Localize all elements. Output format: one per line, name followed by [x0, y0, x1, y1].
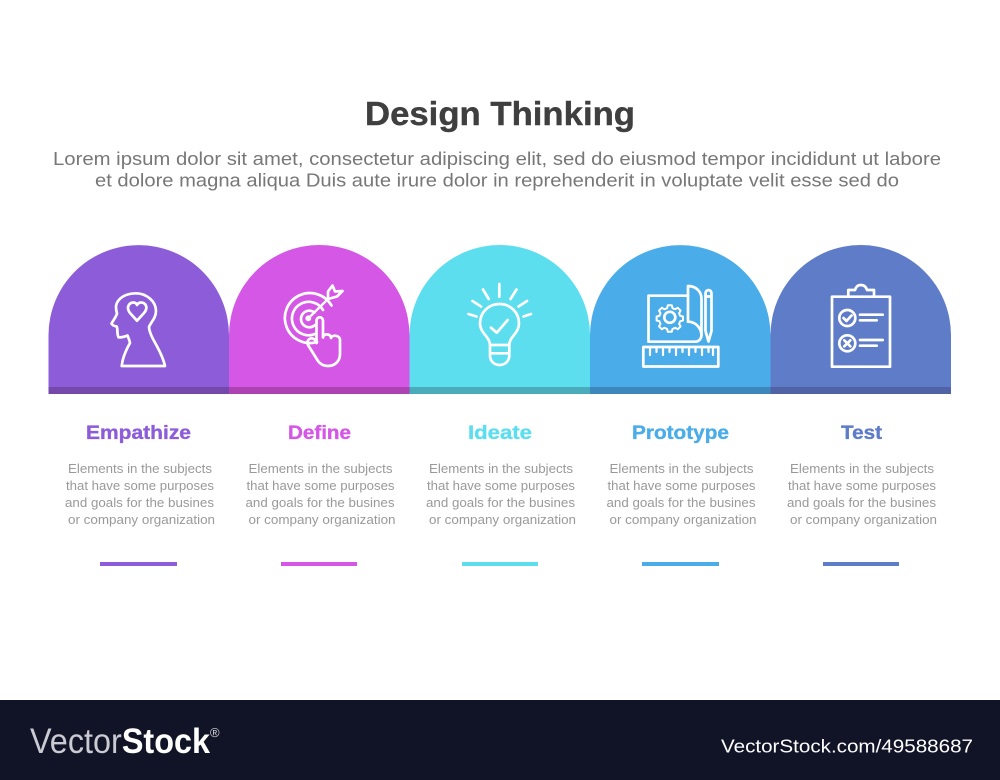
accent bar: define	[281, 562, 357, 566]
icon: clipboard checklist	[832, 285, 890, 367]
text block: prototype description	[606, 461, 756, 527]
accent bar: empathize	[100, 562, 177, 566]
subtitle text: Lorem ipsum dolor sit amet, consectetur adipiscing elit, sed do eiusmod tempor incididunt ut labore	[53, 148, 941, 169]
icon: target with hand	[285, 286, 342, 366]
text block: define description: and goals for the busines	[246, 495, 395, 510]
text block: prototype description: that have some purposes	[608, 478, 756, 493]
footer logo: VectorStock: ®	[210, 725, 220, 740]
text block: test description: or company organization	[790, 512, 937, 527]
heading: Test: Test	[841, 423, 883, 444]
text block: ideate description: or company organization	[429, 512, 576, 527]
panel: define arch	[229, 245, 410, 394]
subtitle text: et dolore magna aliqua Duis aute irure dolor in reprehenderit in voluptate velit esse sed do	[95, 170, 899, 190]
text block: define description	[246, 461, 396, 527]
heading: Ideate: Ideate	[468, 423, 532, 444]
accent bar: prototype	[642, 562, 719, 566]
text block: define description: Elements in the subjects	[248, 461, 393, 476]
footer image id: VectorStock.com/49588687	[721, 736, 973, 756]
text block: prototype description: Elements in the subjects	[610, 461, 754, 476]
footer logo: VectorStock: VectorStock	[30, 722, 210, 761]
heading: Empathize: Empathize	[86, 423, 191, 444]
text block: empathize description: and goals for the busines	[65, 495, 214, 510]
text block: prototype description: or company organization	[610, 512, 756, 527]
panel: prototype arch	[590, 245, 770, 394]
panel: ideate arch	[410, 245, 590, 394]
text block: empathize description: or company organization	[68, 512, 215, 527]
text block: define description: that have some purposes	[246, 478, 395, 493]
accent bar: test	[823, 562, 899, 566]
text block: ideate description	[426, 461, 576, 527]
text block: empathize description	[65, 461, 215, 527]
text block: test description: Elements in the subjects	[790, 461, 935, 476]
icon: blueprint, gear, pencil and ruler	[643, 286, 718, 366]
heading: Define: Define	[288, 423, 351, 444]
text block: ideate description: that have some purposes	[427, 478, 575, 493]
text block: ideate description: Elements in the subjects	[429, 461, 574, 476]
panel: empathize arch	[48, 245, 229, 394]
accent bar: ideate	[462, 562, 538, 566]
text block: define description: or company organization	[248, 512, 396, 527]
icon: light bulb with check	[468, 284, 531, 365]
icon: head with heart	[112, 293, 165, 366]
text block: empathize description: that have some purposes	[66, 478, 214, 493]
text block: test description	[787, 461, 937, 527]
text block: ideate description: and goals for the busines	[426, 495, 575, 510]
footer band	[0, 700, 1000, 780]
text block: test description: that have some purposes	[788, 478, 936, 493]
text block: empathize description: Elements in the subjects	[68, 461, 213, 476]
panel: test arch	[770, 245, 951, 394]
subtitle text	[53, 148, 941, 190]
text block: prototype description: and goals for the busines	[606, 495, 756, 510]
title: Design Thinking	[365, 95, 635, 132]
heading: Prototype: Prototype	[632, 423, 729, 444]
text block: test description: and goals for the busines	[787, 495, 936, 510]
